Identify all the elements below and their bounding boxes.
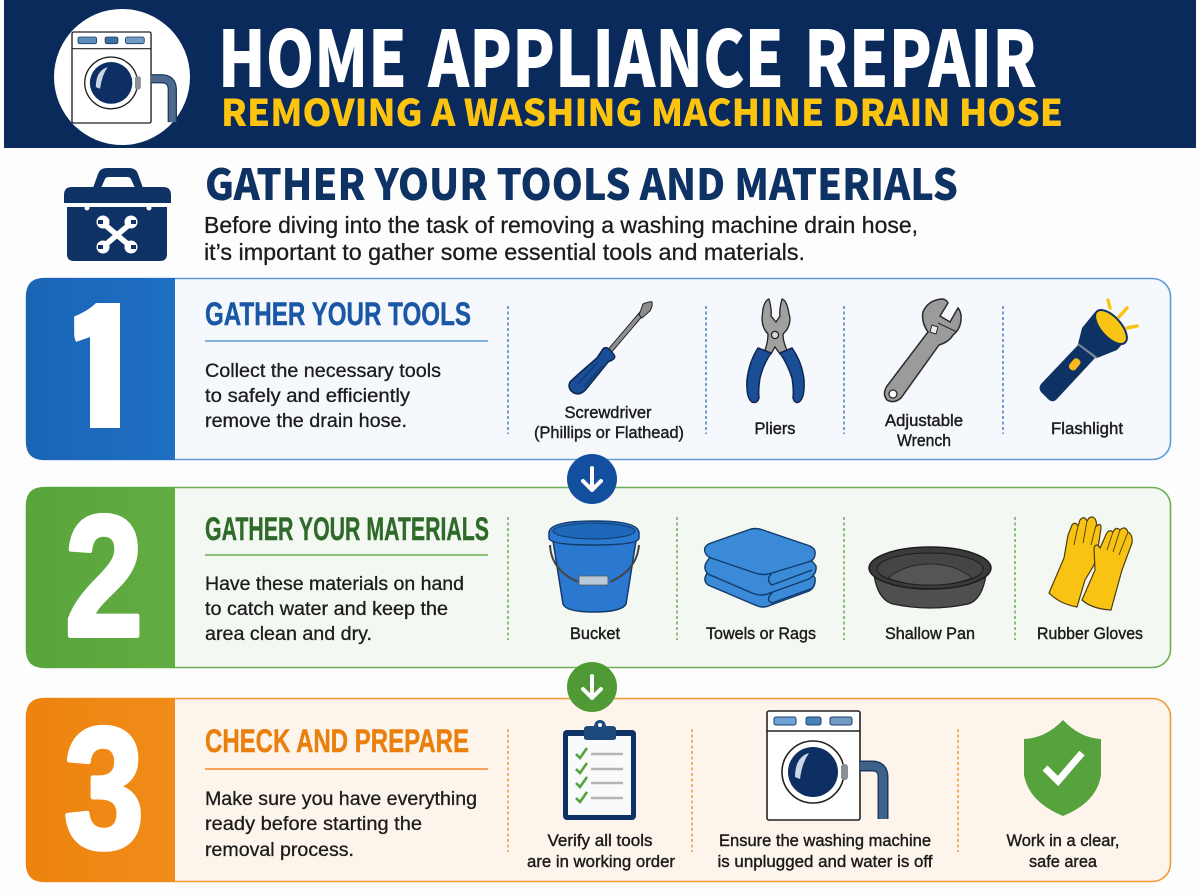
material labels: Rubber Gloves xyxy=(1037,625,1143,643)
tool labels: Adjustable xyxy=(885,412,963,430)
prep labels: safe area xyxy=(1029,853,1098,871)
tool labels xyxy=(534,404,1123,450)
icon: adjustable wrench xyxy=(884,299,961,402)
panel: step 1 gather your tools xyxy=(26,278,1172,460)
icon: clipboard checklist xyxy=(563,720,636,820)
title: HOME xyxy=(218,0,407,110)
icon: washing machine xyxy=(767,711,883,820)
icon: shallow pan xyxy=(869,547,991,608)
icon: safety shield xyxy=(1024,720,1101,816)
heading: GATHER YOUR TOOLS xyxy=(205,296,471,332)
prep labels: are in working order xyxy=(527,853,676,871)
step number 3: 3 xyxy=(64,692,144,884)
description: remove the drain hose. xyxy=(205,411,407,432)
title: APPLIANCE xyxy=(427,0,784,110)
prep labels: Verify all tools xyxy=(548,832,652,850)
description: to safely and efficiently xyxy=(205,386,411,407)
panel: step 3 check and prepare xyxy=(26,692,1170,884)
material labels xyxy=(570,625,1143,643)
intro text xyxy=(204,212,918,265)
tool labels: Wrench xyxy=(897,432,951,450)
title: REPAIR xyxy=(804,0,1037,110)
material labels: Shallow Pan xyxy=(885,625,975,643)
prep labels: Work in a clear, xyxy=(1006,832,1120,850)
icon: towels xyxy=(705,528,816,607)
step number 1: 1 xyxy=(71,228,137,478)
tool labels: Pliers xyxy=(754,420,796,438)
intro section xyxy=(64,151,958,265)
icon: pliers xyxy=(747,299,804,402)
description: Have these materials on hand xyxy=(205,574,464,595)
description xyxy=(205,789,477,861)
description xyxy=(205,574,464,645)
prep labels: Ensure the washing machine xyxy=(719,832,931,850)
heading: CHECK AND PREPARE xyxy=(205,723,469,759)
prep labels: is unplugged and water is off xyxy=(718,853,933,871)
description: Collect the necessary tools xyxy=(205,361,441,382)
arrow: step 2 to step 3 xyxy=(567,662,617,712)
icon: toolbox xyxy=(64,168,171,261)
icon: washing machine in circle xyxy=(54,9,190,145)
icon: screwdriver xyxy=(569,302,652,394)
icon: flashlight xyxy=(1040,300,1137,401)
heading: GATHER YOUR MATERIALS xyxy=(205,511,489,547)
description: ready before starting the xyxy=(205,814,422,835)
material labels: Towels or Rags xyxy=(706,625,816,643)
subtitle: REMOVING A WASHING MACHINE DRAIN HOSE xyxy=(221,83,1063,137)
intro text: Before diving into the task of removing a washing machine drain hose, xyxy=(204,212,918,238)
title xyxy=(218,0,1037,110)
arrow: step 1 to step 2 xyxy=(567,454,617,504)
step number 2: 2 xyxy=(65,480,143,672)
icon: rubber gloves xyxy=(1049,517,1132,610)
description: area clean and dry. xyxy=(205,624,372,645)
description: to catch water and keep the xyxy=(205,599,448,620)
header banner xyxy=(4,0,1196,148)
icon: bucket xyxy=(549,521,639,612)
description: Make sure you have everything xyxy=(205,789,477,810)
tool labels: Screwdriver xyxy=(564,404,652,422)
intro text: it’s important to gather some essential tools and materials. xyxy=(204,239,805,265)
tool labels: Flashlight xyxy=(1051,420,1123,438)
panel: step 2 gather your materials xyxy=(26,480,1170,672)
section heading: GATHER YOUR TOOLS AND MATERIALS xyxy=(205,151,958,213)
prep labels xyxy=(527,832,1120,871)
description: removal process. xyxy=(205,840,354,861)
tool labels: (Phillips or Flathead) xyxy=(534,424,684,442)
description xyxy=(205,361,441,432)
material labels: Bucket xyxy=(570,625,620,643)
